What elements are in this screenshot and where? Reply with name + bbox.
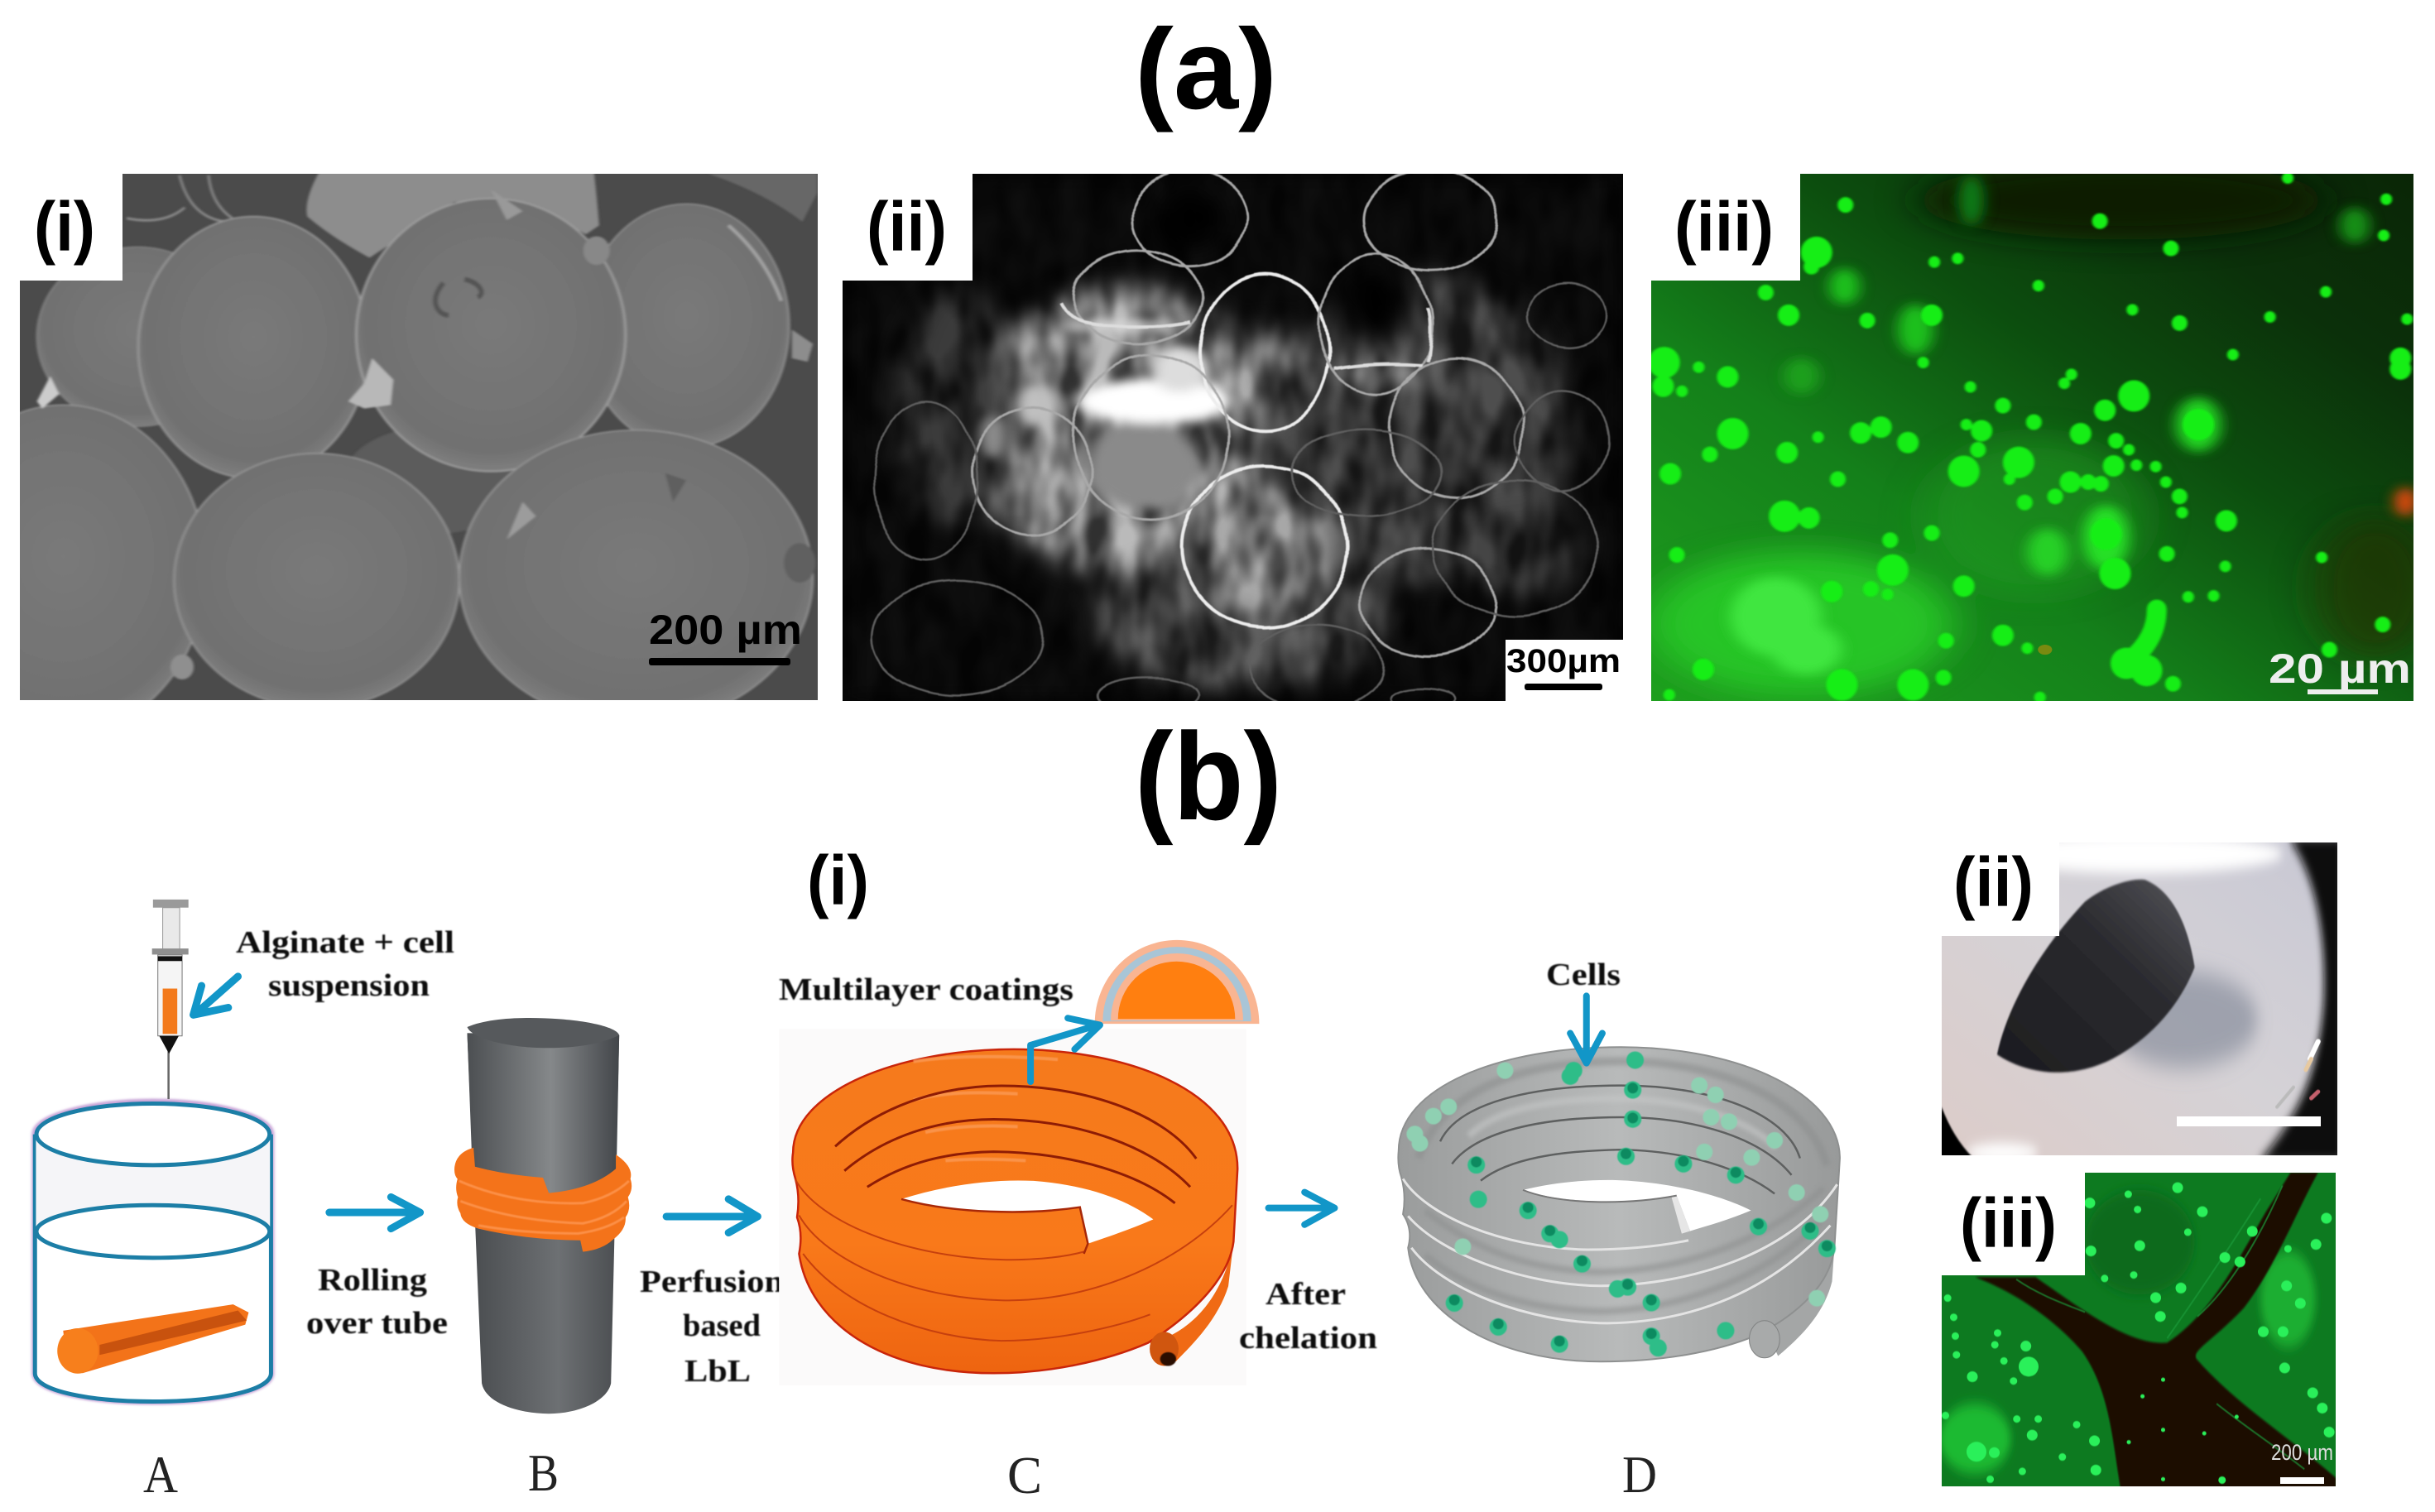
label: (iii): (iii) (1960, 1184, 2057, 1262)
label box (iii) (1651, 174, 1800, 281)
label box (ii) (1942, 842, 2059, 936)
caption: Rolling over tube: over tube (306, 1306, 448, 1341)
heading: (a): (a) (1135, 6, 1277, 133)
caption: After chelation: chelation (1239, 1321, 1377, 1356)
arrow: cells pointer (1570, 996, 1602, 1063)
alginate rod (57, 1304, 248, 1374)
caption: After chelation (1239, 1277, 1377, 1356)
scale bar (2177, 1116, 2321, 1126)
scale box (1506, 640, 1623, 701)
panel: b(iii) tube fluorescence (1939, 1173, 2336, 1489)
tube highlights (914, 1057, 1058, 1160)
label: (i): (i) (34, 188, 95, 266)
panel: a(iii) live cell fluorescence (1649, 161, 2435, 701)
caption: Alginate + cell suspension: suspension (268, 968, 430, 1003)
label: (ii): (ii) (1953, 843, 2034, 921)
fibre streaks (2016, 1185, 2304, 1469)
scale text: 200 um: 200 µm (649, 607, 802, 653)
caption: Alginate + cell suspension (236, 925, 454, 1003)
arrow: A to B (329, 1197, 420, 1229)
panel: a(ii) fluorescence rings (843, 170, 1623, 713)
panel: a(i) SEM of microbeads (0, 171, 818, 735)
scale text: 200 um: 200 µm (2271, 1440, 2333, 1465)
coil body (792, 1049, 1237, 1373)
heading: (b): (b) (1135, 707, 1282, 846)
cell dots (1663, 178, 2407, 698)
step A: beaker and syringe (35, 900, 271, 1402)
coil tail (1150, 1241, 1233, 1365)
label box (i) (20, 174, 122, 281)
label box (ii) (843, 174, 973, 281)
tube shading (1418, 1061, 1827, 1311)
caption: Perfusion based LbL: LbL (684, 1354, 751, 1389)
panel: b(i) fabrication schematic (35, 842, 1840, 1505)
caption: After chelation: After (1266, 1277, 1346, 1312)
caption: Rolling over tube: Rolling (318, 1263, 427, 1298)
cells (1414, 1060, 1827, 1348)
bead rings (872, 170, 1609, 713)
panel: b(ii) tube micrograph (1939, 834, 2343, 1164)
arrow: B to C (666, 1199, 757, 1233)
arrow: coating callout (1030, 1018, 1100, 1082)
label box (iii) (1942, 1173, 2085, 1275)
scale bar (2308, 689, 2378, 694)
step C: orange coil (779, 940, 1259, 1385)
glow patches (1649, 161, 2435, 696)
scale bar (1525, 684, 1602, 690)
label: (iii): (iii) (1674, 188, 1774, 266)
beaker glass (35, 1135, 271, 1402)
scale text: 20 um: 20 µm (2269, 646, 2411, 692)
cross-section semicircle (1095, 940, 1259, 1024)
fibrous glow (843, 171, 1623, 703)
caption: Multilayer coatings: Multilayer coatings (779, 972, 1073, 1007)
step label: A: A (143, 1445, 178, 1504)
caption: Perfusion based LbL: Perfusion (640, 1265, 784, 1299)
label: (ii): (ii) (867, 188, 947, 266)
scale bar (2280, 1477, 2324, 1484)
caption: Cells: Cells (1546, 958, 1621, 992)
beaker glow (35, 1102, 271, 1402)
step label: B: B (528, 1443, 559, 1502)
caption: Perfusion based LbL: based (683, 1308, 761, 1343)
step label: C: C (1007, 1446, 1042, 1505)
syringe (152, 900, 189, 1099)
step B: rod with wound tube (454, 1018, 632, 1414)
coil body (1398, 1047, 1840, 1361)
step D: gray coil with cells (1398, 996, 1840, 1361)
caption: Rolling over tube (306, 1263, 448, 1341)
arrow: syringe pointer (194, 977, 238, 1015)
arrow: C to D (1269, 1193, 1335, 1225)
caption: Perfusion based LbL (640, 1265, 784, 1389)
label: (i): (i) (807, 842, 869, 919)
caption: Alginate + cell suspension: Alginate + cell (236, 925, 454, 960)
scale text: 300 um: 300µm (1506, 643, 1621, 679)
coil tail (1763, 1248, 1834, 1356)
scale bar (649, 658, 790, 665)
step label: D: D (1622, 1445, 1657, 1504)
